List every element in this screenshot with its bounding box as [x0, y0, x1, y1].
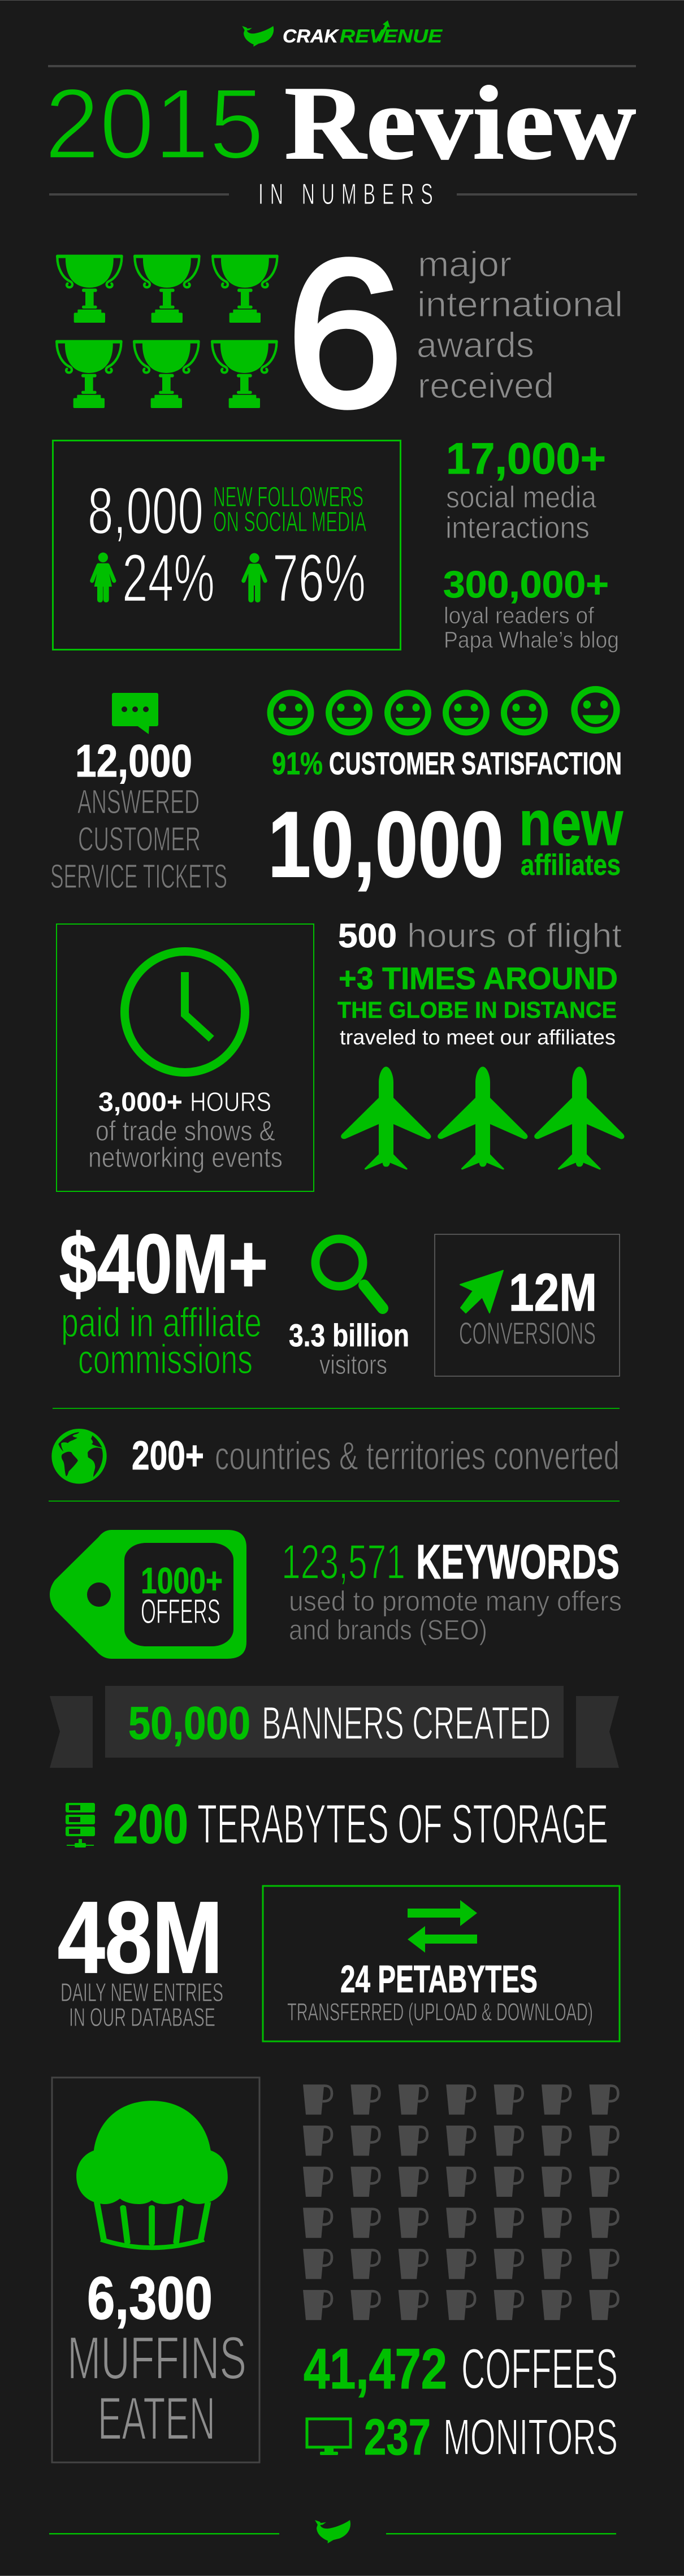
footer — [49, 2520, 616, 2543]
awards caption — [417, 245, 623, 406]
stat: social interactions — [445, 433, 606, 545]
icon: six trophies — [55, 255, 279, 408]
stat: countries — [51, 1429, 620, 1484]
icon: whale — [242, 26, 274, 47]
tickets count: 12,000 — [75, 736, 192, 787]
storage text: 200 — [113, 1793, 188, 1855]
panel: conversions — [435, 1234, 620, 1376]
banner: banners created — [50, 1686, 619, 1768]
visitors text: 3.3 billion — [289, 1317, 409, 1353]
muffins text: 6,300 — [87, 2264, 213, 2332]
subtitle: in numbers — [49, 178, 637, 211]
followers count: 8,000 — [88, 474, 204, 548]
stat: monitors — [307, 2409, 618, 2466]
icon: arrow — [460, 1270, 503, 1313]
stat: keywords: 123,571 — [282, 1535, 405, 1589]
logo wordmark — [283, 20, 443, 46]
big number 6: 6 — [286, 215, 404, 450]
title — [45, 65, 636, 181]
stat: blog readers: 300,000+ — [443, 563, 609, 606]
followers label: ON SOCIAL MEDIA — [213, 506, 366, 537]
subtitle: in numbers: IN NUMBERS — [258, 178, 433, 211]
stat: daily entries: DAILY NEW ENTRIES — [60, 1977, 223, 2007]
tickets label: CUSTOMER — [78, 820, 201, 858]
stat: daily entries: 48M — [58, 1881, 223, 1994]
stat: new affiliates: 10,000 — [268, 792, 504, 896]
stat: coffees — [304, 2338, 618, 2401]
tickets label: ANSWERED — [77, 783, 200, 821]
conversions count: 12M — [509, 1263, 597, 1322]
panel: support tickets — [50, 693, 227, 895]
muffins text: MUFFINS — [67, 2324, 246, 2392]
icon: muffin — [76, 2101, 228, 2248]
stat: keywords: and brands (SEO) — [289, 1614, 487, 1646]
stat: keywords: used to promote many offers — [289, 1585, 622, 1617]
awards caption: awards — [417, 326, 534, 365]
petabytes text: 24 PETABYTES — [340, 1958, 538, 2001]
stat: commissions — [59, 1217, 268, 1382]
stat: flight hours: +3 TIMES AROUND — [339, 961, 618, 996]
stat: social interactions: interactions — [445, 511, 590, 545]
logo: CrakRevenue — [242, 20, 443, 47]
icon: three planes — [341, 1066, 624, 1169]
petabytes text — [287, 1958, 593, 2026]
stat: storage — [66, 1793, 608, 1855]
stat: keywords — [282, 1535, 622, 1646]
stat: flight hours: hours of flight — [407, 917, 622, 955]
panel: awards — [55, 215, 623, 450]
stat: coffees: 41,472 — [304, 2338, 447, 2401]
followers label — [213, 481, 366, 537]
stat: daily entries — [58, 1881, 223, 2032]
logo wordmark: CRAK — [283, 25, 339, 46]
hours label: networking events — [88, 1142, 283, 1173]
monitors text — [364, 2409, 618, 2466]
stat: social interactions: 17,000+ — [446, 433, 606, 483]
stat: blog readers: loyal readers of — [444, 602, 595, 628]
women share: 24% — [122, 540, 215, 616]
title: 2015 — [45, 68, 264, 180]
stat: new affiliates: new — [519, 788, 624, 858]
stat: flight hours: THE GLOBE IN DISTANCE — [337, 997, 617, 1023]
icon: woman — [90, 553, 116, 602]
stat: daily entries: IN OUR DATABASE — [69, 2002, 215, 2032]
panel: petabytes — [263, 1886, 620, 2041]
awards caption: received — [418, 366, 554, 406]
offers text: OFFERS — [141, 1592, 220, 1630]
visitors text: visitors — [319, 1350, 387, 1380]
offers text: 1000+ — [141, 1560, 223, 1601]
tickets label: SERVICE TICKETS — [50, 857, 227, 895]
icon: man — [241, 553, 267, 602]
stat: flight hours: traveled to meet our affiliates — [340, 1026, 616, 1049]
visitors text — [289, 1317, 409, 1380]
stat: blog readers — [443, 563, 619, 653]
hours label — [88, 1087, 283, 1173]
countries text: 200+ — [132, 1433, 204, 1478]
men share: 76% — [272, 540, 366, 616]
hours label: HOURS — [190, 1087, 271, 1117]
stat: commissions: $40M+ — [59, 1217, 268, 1311]
stat: commissions: paid in affiliate — [61, 1300, 262, 1346]
icon grid: coffee mugs — [303, 2084, 618, 2320]
muffins text — [67, 2264, 246, 2452]
icon: magnifier — [315, 1239, 383, 1308]
muffins text: EATEN — [98, 2384, 215, 2452]
banner text — [128, 1698, 551, 1749]
stat: new affiliates: affiliates — [521, 849, 621, 882]
conversions label: CONVERSIONS — [459, 1316, 596, 1351]
panel: muffins — [52, 2078, 259, 2462]
icon: offers price tag — [50, 1530, 246, 1659]
stat: social interactions: social media — [446, 480, 597, 514]
monitors text: 237 — [364, 2409, 431, 2466]
title: Review — [284, 65, 636, 181]
icon: clock — [124, 952, 245, 1073]
stat: blog readers: Papa Whale’s blog — [444, 627, 619, 653]
icon: server — [66, 1803, 95, 1848]
panel: new followers — [53, 441, 400, 650]
panel: trade show hours — [57, 924, 314, 1191]
hours label: 3,000+ — [98, 1087, 183, 1117]
tickets label — [50, 783, 227, 895]
hours label: of trade shows & — [96, 1115, 275, 1147]
icon: monitor — [307, 2419, 350, 2455]
stat: commissions: commissions — [78, 1337, 253, 1382]
icon: footer whale — [315, 2520, 350, 2543]
icon: chat bubble — [112, 693, 158, 734]
icon: transfer arrows — [408, 1900, 477, 1953]
followers label: NEW FOLLOWERS — [213, 481, 363, 513]
logo wordmark: REVENUE — [340, 25, 443, 46]
icon: globe — [51, 1429, 107, 1484]
offers text — [141, 1560, 223, 1630]
awards caption: major — [418, 245, 512, 284]
stat: customer satisfaction: 91% — [272, 745, 323, 781]
banner text: 50,000 — [128, 1698, 250, 1749]
stat: visitors — [289, 1239, 409, 1380]
stat: flight hours — [337, 917, 622, 1049]
awards caption: international — [417, 285, 623, 324]
icon: six smileys — [270, 689, 617, 732]
stat: flight hours: 500 — [338, 917, 397, 955]
